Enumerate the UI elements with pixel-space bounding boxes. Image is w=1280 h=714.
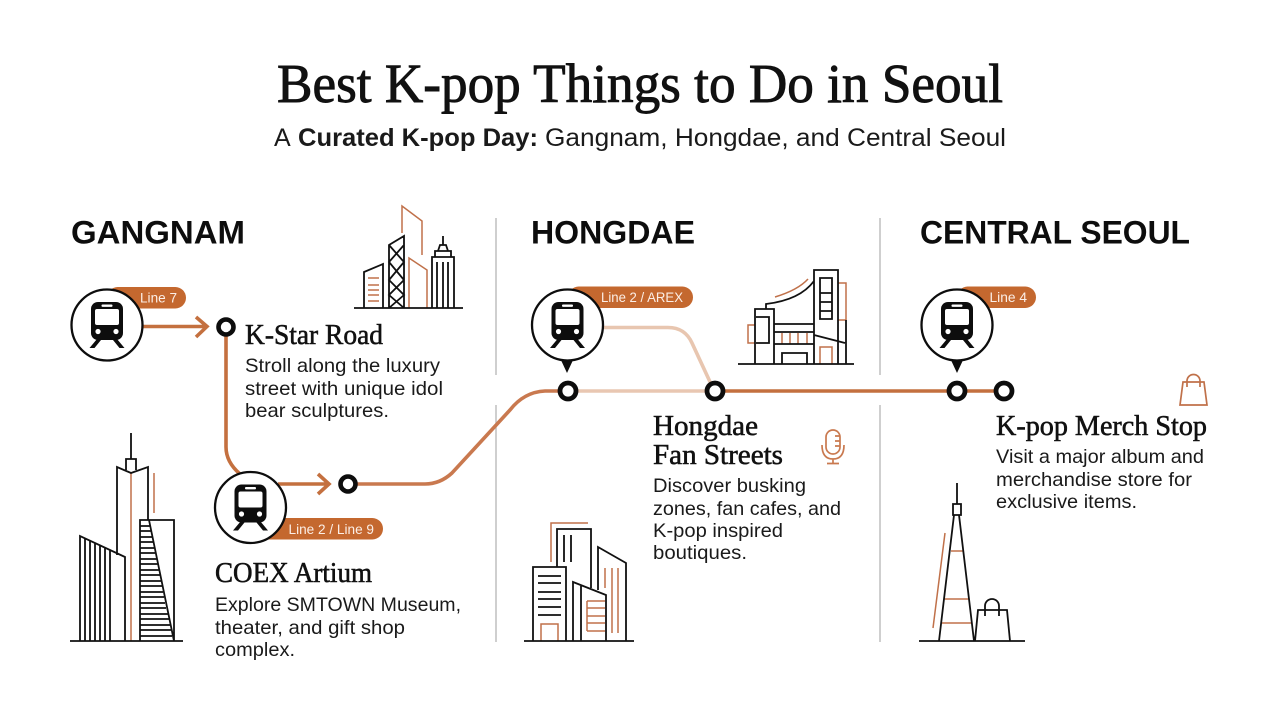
station nodes bbox=[218, 320, 1012, 492]
stop: COEX Artium: theater, and gift shop bbox=[215, 617, 405, 639]
stop: COEX Artium: COEX Artium bbox=[215, 558, 372, 589]
arrow: to K-Star Road bbox=[143, 317, 207, 337]
stop: COEX Artium: Explore SMTOWN Museum, bbox=[215, 594, 461, 616]
heading: Gangnam: GANGNAM bbox=[71, 214, 245, 250]
stop: K-pop Merch Stop: exclusive items. bbox=[996, 491, 1137, 513]
subtitle: Gangnam, Hongdae, and Central Seoul bbox=[545, 124, 1006, 152]
stop: Hongdae Fan Streets: Hongdae bbox=[653, 411, 758, 442]
icon: Gangnam small skyline bbox=[354, 206, 463, 308]
title: Best K-pop Things to Do in Seoul bbox=[277, 53, 1003, 114]
stop: K-Star Road: street with unique idol bbox=[245, 378, 443, 400]
station badge: Line 7: Line 7 bbox=[140, 290, 177, 306]
subtitle: A bbox=[274, 124, 291, 152]
stop: K-pop Merch Stop: merchandise store for bbox=[996, 469, 1193, 491]
icon: Gangnam tower skyline bbox=[70, 433, 183, 641]
arrow: to COEX line bbox=[278, 474, 329, 494]
stop: Hongdae Fan Streets: boutiques. bbox=[653, 542, 747, 564]
stop: K-Star Road: Stroll along the luxury bbox=[245, 355, 440, 377]
stop: K-Star Road: K-Star Road bbox=[245, 320, 383, 351]
stop: Hongdae Fan Streets bbox=[653, 411, 841, 564]
route line bbox=[226, 328, 1004, 484]
station badge: Line 4 bbox=[922, 286, 1036, 373]
stop: COEX Artium bbox=[215, 558, 461, 661]
stop: Hongdae Fan Streets: Discover busking bbox=[653, 475, 806, 497]
icon: Hongdae building bbox=[738, 270, 854, 364]
stop: K-pop Merch Stop: Visit a major album and bbox=[996, 446, 1204, 468]
stop: K-Star Road bbox=[245, 320, 443, 422]
stop: K-Star Road: bear sculptures. bbox=[245, 400, 389, 422]
stop: Hongdae Fan Streets: K-pop inspired bbox=[653, 520, 783, 542]
station badge: Line 2 / Line 9: Line 2 / Line 9 bbox=[288, 521, 374, 537]
stop: K-pop Merch Stop bbox=[996, 411, 1207, 513]
station badge: Line 2 / Line 9 bbox=[215, 472, 383, 543]
icon: Hongdae skyline bbox=[524, 523, 634, 641]
heading: Hongdae: HONGDAE bbox=[531, 214, 695, 250]
subtitle bbox=[274, 124, 1006, 152]
icon: shopping bag bbox=[1180, 374, 1207, 405]
station badge: Line 7 bbox=[72, 287, 186, 360]
station badge: Line 2 / AREX bbox=[532, 286, 693, 373]
station badge: Line 2 / AREX: Line 2 / AREX bbox=[601, 289, 684, 305]
heading: Central Seoul: CENTRAL SEOUL bbox=[920, 214, 1190, 250]
stop: K-pop Merch Stop: K-pop Merch Stop bbox=[996, 411, 1207, 442]
stop: Hongdae Fan Streets: Fan Streets bbox=[653, 440, 783, 471]
subtitle: Curated K-pop Day: bbox=[298, 124, 538, 152]
station badge: Line 4: Line 4 bbox=[990, 289, 1027, 305]
icon: Seoul tower with bag bbox=[919, 483, 1025, 641]
stop: Hongdae Fan Streets: zones, fan cafes, and bbox=[653, 498, 841, 520]
icon: microphone bbox=[822, 430, 844, 464]
stop: COEX Artium: complex. bbox=[215, 639, 295, 661]
